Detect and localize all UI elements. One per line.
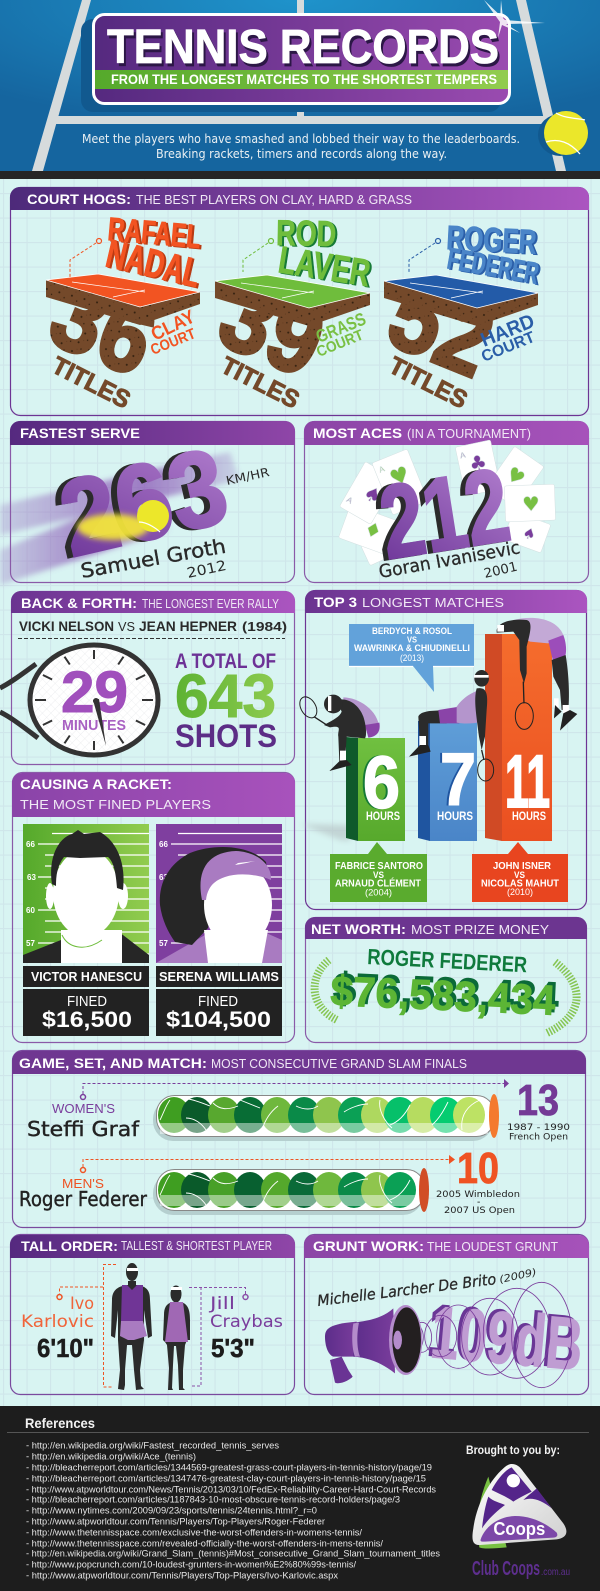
Rod Laver block bbox=[205, 212, 375, 414]
heading bbox=[11, 591, 295, 613]
logo: Club Coops bbox=[472, 1464, 570, 1580]
heading: THE BEST PLAYERS ON CLAY, HARD & GRASS bbox=[136, 192, 412, 207]
intro text: Breaking rackets, timers and records along the way. bbox=[156, 147, 447, 161]
heading: THE MOST FINED PLAYERS bbox=[20, 797, 211, 812]
Roger Federer block: ROGER bbox=[446, 219, 537, 262]
heading bbox=[12, 1051, 586, 1074]
references list: - http://bleacherreport.com/articles/1347476-greatest-clay-court-players-in-tennis-history/page/15 bbox=[26, 1474, 426, 1484]
callout: Santoro vs Clement: (2004) bbox=[365, 888, 392, 898]
heading bbox=[10, 1235, 295, 1258]
Rafael Nadal block: RAFAEL bbox=[106, 210, 202, 255]
number 212: 212 bbox=[367, 448, 512, 583]
mugshot: Victor Hanescu: 57 bbox=[26, 939, 35, 948]
references list: - http://en.wikipedia.org/wiki/Fastest_recorded_tennis_serves bbox=[26, 1440, 279, 1452]
heading: COURT HOGS: bbox=[27, 191, 131, 207]
heading: TALL ORDER: bbox=[21, 1238, 118, 1254]
height brackets bbox=[57, 1264, 248, 1387]
number 263: 263 bbox=[49, 424, 238, 579]
panel: most aces bbox=[304, 421, 589, 583]
icon: megaphone bbox=[325, 1305, 422, 1383]
references list: - http://www.atpworldtour.com/Tennis/Players/Top-Players/Ivo-Karlovic.aspx bbox=[26, 1570, 338, 1582]
year: (2009) bbox=[498, 1267, 538, 1286]
mugshot: Serena Williams: 66 bbox=[159, 840, 168, 849]
bar: 6 hours: 6 bbox=[361, 741, 398, 824]
men's label: Roger Federer bbox=[19, 1187, 148, 1211]
Rod Laver block: LAVER bbox=[278, 240, 375, 296]
playing cards: ♥ bbox=[501, 461, 530, 491]
icon: racket clock bbox=[0, 645, 158, 755]
callout: Isner vs Mahut: VS bbox=[514, 870, 525, 880]
label: Ivo Karlovic bbox=[21, 1294, 94, 1363]
panel: net worth bbox=[305, 917, 587, 1042]
references list: - http://en.wikipedia.org/wiki/Grand_Slam_(tennis)#Most_consecutive_Grand_Slam_tournament_titles bbox=[26, 1548, 440, 1560]
bar: 7 hours: HOURS bbox=[437, 809, 473, 823]
references list: - http://www.nytimes.com/2009/09/23/sports/tennis/24tennis.html?_r=0 bbox=[26, 1506, 317, 1516]
icon: racket clock: MINUTES bbox=[62, 717, 126, 734]
references list: - http://www.thetennisspace.com/revealed-officially-the-worst-offenders-in-mens-tennis/ bbox=[26, 1538, 383, 1550]
label: Jill Craybas: 5'3" bbox=[211, 1333, 255, 1363]
figure: 10 finals: - bbox=[477, 1197, 480, 1208]
sparkle bbox=[484, 0, 545, 38]
Rod Laver block: LAVER bbox=[276, 239, 373, 295]
Rafael Nadal block: CLAY bbox=[148, 306, 199, 345]
women's label: Steffi Graf bbox=[27, 1117, 140, 1141]
Rafael Nadal block: NADAL bbox=[104, 233, 206, 297]
shots total: A TOTAL OF bbox=[175, 650, 276, 673]
mugshot: Serena Williams: 63 bbox=[159, 873, 168, 882]
bar: 7 hours: 7 bbox=[440, 738, 476, 821]
panel: court hogs bbox=[10, 187, 589, 416]
icon: tennis ball bbox=[538, 111, 588, 156]
logo: Club Coops: Coops bbox=[493, 1518, 545, 1539]
bar: 7 hours bbox=[418, 721, 477, 841]
heading: (IN A TOURNAMENT) bbox=[407, 426, 531, 441]
icon: racket clock: 29 bbox=[61, 660, 128, 725]
Rod Laver block: ROD bbox=[278, 213, 339, 255]
heading: GAME, SET, AND MATCH: bbox=[19, 1055, 207, 1071]
playing cards: ♦ bbox=[361, 516, 386, 544]
fine: Victor Hanescu: $16,500 bbox=[42, 1007, 132, 1032]
heading: GRUNT WORK: bbox=[313, 1238, 424, 1254]
mugshot: Serena Williams bbox=[156, 824, 282, 963]
heading bbox=[304, 421, 589, 445]
playing cards: ♠ bbox=[359, 480, 387, 509]
panel: tall order bbox=[10, 1234, 295, 1394]
match up line: JEAN HEPNER bbox=[139, 618, 237, 634]
fine: Victor Hanescu bbox=[23, 989, 149, 1036]
player name: Goran Ivanisevic bbox=[377, 537, 522, 583]
references list: - http://bleacherreport.com/articles/1344569-greatest-grass-court-players-in-tennis-history/page/19 bbox=[26, 1462, 432, 1474]
callout: Isner vs Mahut bbox=[472, 842, 568, 902]
Rod Laver block: COURT bbox=[314, 327, 366, 361]
exhausted players bbox=[296, 618, 577, 781]
references list: - http://en.wikipedia.org/wiki/Ace_(tennis) bbox=[26, 1452, 196, 1462]
heading: MOST CONSECUTIVE GRAND SLAM FINALS bbox=[211, 1056, 467, 1071]
callout: Berdych and Rosol match bbox=[349, 624, 474, 692]
heading: LONGEST MATCHES bbox=[362, 595, 504, 610]
Roger Federer block: 52 bbox=[374, 258, 508, 399]
mugshot: Victor Hanescu: 66 bbox=[26, 840, 35, 849]
figure: 13 finals bbox=[507, 1076, 570, 1142]
heading: THE LONGEST EVER RALLY bbox=[142, 596, 279, 611]
bar: 11 hours bbox=[485, 634, 552, 841]
callout: Isner vs Mahut: (2010) bbox=[507, 887, 533, 897]
Roger Federer block: HARD bbox=[478, 310, 538, 352]
Rafael Nadal block: COURT bbox=[148, 325, 198, 359]
men's label: MEN'S bbox=[62, 1176, 104, 1191]
Roger Federer block: COURT bbox=[479, 329, 538, 366]
heading bbox=[12, 773, 295, 817]
prize figure: $76,583,434 bbox=[333, 964, 560, 1021]
figure: 13 finals: 13 bbox=[517, 1076, 559, 1125]
tube: 13 tennis balls bbox=[153, 1094, 499, 1141]
figure: 10 finals: 10 bbox=[457, 1144, 499, 1193]
callout: Berdych and Rosol match: (2013) bbox=[400, 653, 424, 663]
bar: 6 hours bbox=[346, 737, 405, 841]
shots total bbox=[175, 650, 277, 754]
name plate: Serena Williams bbox=[156, 966, 282, 987]
playing cards bbox=[338, 440, 556, 566]
panel: causing a racket bbox=[12, 772, 295, 1042]
icon: tennis ball with trail bbox=[77, 500, 169, 540]
panel: top 3 longest matches bbox=[296, 590, 587, 910]
playing cards: A bbox=[459, 450, 467, 460]
footer panel bbox=[0, 1406, 600, 1591]
mugshot: Victor Hanescu bbox=[23, 824, 149, 963]
heading: NET WORTH: bbox=[311, 921, 406, 937]
heading bbox=[304, 1235, 589, 1258]
speed unit: KM/HR bbox=[225, 465, 271, 488]
Rafael Nadal block: 36 bbox=[36, 257, 170, 398]
heading: THE LOUDEST GRUNT bbox=[427, 1239, 558, 1254]
playing cards: ♥ bbox=[522, 492, 540, 516]
figure: tall man bbox=[111, 1263, 152, 1390]
year: 2001 bbox=[483, 560, 519, 582]
number 212: 212 bbox=[372, 447, 517, 582]
callout: Berdych and Rosol match: BERDYCH & ROSOL bbox=[372, 626, 452, 636]
bar: 11 hours: HOURS bbox=[512, 809, 546, 823]
playing cards: ♠ bbox=[384, 545, 392, 556]
callout: Santoro vs Clement: FABRICE SANTORO bbox=[335, 861, 423, 872]
header: tennis court banner bbox=[0, 0, 600, 179]
heading: CAUSING A RACKET: bbox=[20, 776, 172, 792]
figure: 13 finals: 1987 - 1990 bbox=[507, 1123, 570, 1133]
number 263: 263 bbox=[43, 425, 232, 580]
player name: Samuel Groth bbox=[79, 534, 228, 583]
tube: 10 tennis balls bbox=[153, 1168, 429, 1215]
panel: grunt work bbox=[304, 1234, 589, 1394]
fine: Victor Hanescu: FINED bbox=[67, 993, 107, 1010]
year: 2012 bbox=[186, 558, 228, 582]
floor shadow bbox=[300, 824, 350, 841]
Roger Federer block: TITLES bbox=[384, 351, 472, 414]
label: Ivo Karlovic: Ivo bbox=[70, 1294, 94, 1314]
references list: - http://www.atpworldtour.com/News/Tennis/2013/03/10/FedEx-Reliability-Career-Hard-Court-Records bbox=[26, 1484, 436, 1496]
heading: MOST PRIZE MONEY bbox=[411, 922, 549, 937]
match up line: VICKI NELSON bbox=[19, 618, 114, 634]
callout: Santoro vs Clement bbox=[330, 842, 427, 902]
title text: TENNIS RECORDS bbox=[109, 24, 501, 77]
heading: MOST ACES bbox=[313, 425, 402, 441]
references list: - http://bleacherreport.com/articles/1187843-10-most-obscure-tennis-record-holders/page/3 bbox=[26, 1494, 400, 1506]
title box bbox=[94, 14, 510, 104]
laurels bbox=[315, 960, 577, 1033]
panel: back and forth bbox=[0, 591, 295, 764]
heading bbox=[305, 590, 587, 613]
fine: Serena Williams: $104,500 bbox=[166, 1007, 271, 1032]
subtitle: FROM THE LONGEST MATCHES TO THE SHORTEST TEMPERS bbox=[111, 71, 497, 87]
mugshot: Victor Hanescu: 63 bbox=[27, 873, 36, 882]
heading bbox=[10, 187, 589, 210]
fine: Serena Williams: FINED bbox=[198, 993, 238, 1010]
figure: short woman bbox=[163, 1286, 190, 1390]
label: Ivo Karlovic: Karlovic bbox=[21, 1312, 94, 1332]
references heading: References bbox=[25, 1415, 95, 1431]
playing cards: A bbox=[377, 464, 386, 475]
Rafael Nadal block: TITLES bbox=[47, 351, 135, 414]
playing cards: ♥ bbox=[386, 462, 414, 492]
Roger Federer block: FEDERER bbox=[445, 242, 541, 291]
Roger Federer block: ROGER bbox=[448, 220, 539, 263]
Roger Federer block bbox=[374, 219, 543, 414]
Rod Laver block: 39 bbox=[205, 258, 339, 399]
callout: Berdych and Rosol match: WAWRINKA & CHIUDINELLI bbox=[354, 643, 470, 653]
sponsor line: Brought to you by: bbox=[466, 1445, 560, 1457]
women's label bbox=[27, 1079, 509, 1141]
Rod Laver block: GRASS bbox=[313, 309, 369, 347]
speed blur bbox=[0, 452, 240, 585]
figure: 10 finals: 2007 US Open bbox=[444, 1206, 515, 1216]
player name: Michelle Larcher De Brito bbox=[316, 1270, 497, 1310]
match up line bbox=[19, 618, 287, 634]
sound rings bbox=[407, 1282, 572, 1388]
match up line: VS bbox=[118, 619, 135, 634]
label: Ivo Karlovic: 6'10" bbox=[37, 1333, 94, 1363]
Rod Laver block: ROD bbox=[276, 212, 337, 254]
bar: 6 hours: 6 bbox=[363, 741, 400, 824]
match up line: (1984) bbox=[242, 619, 287, 634]
bar: 6 hours: HOURS bbox=[366, 809, 400, 823]
references list: - http://www.thetennisspace.com/exclusive-the-worst-offenders-in-womens-tennis/ bbox=[26, 1528, 362, 1538]
intro text: Meet the players who have smashed and lobbed their way to the leaderboards. bbox=[82, 132, 520, 146]
women's label: WOMEN'S bbox=[52, 1101, 115, 1116]
intro text bbox=[82, 132, 520, 161]
shots total: SHOTS bbox=[175, 718, 277, 754]
Rod Laver block: TITLES bbox=[216, 351, 304, 414]
Rafael Nadal block: RAFAEL bbox=[108, 211, 204, 256]
mugshot: Victor Hanescu: 60 bbox=[26, 906, 35, 915]
heading: TALLEST & SHORTEST PLAYER bbox=[121, 1238, 272, 1253]
figure: 13 finals: French Open bbox=[509, 1132, 568, 1142]
prize figure: $76,583,434 bbox=[330, 967, 557, 1024]
playing cards: ♣ bbox=[467, 449, 489, 477]
name plate: Victor Hanescu: VICTOR HANESCU bbox=[31, 969, 142, 984]
bar: 11 hours: 11 bbox=[505, 740, 550, 823]
callout: Santoro vs Clement: ARNAUD CLÉMENT bbox=[335, 876, 421, 890]
shots total: 643 bbox=[175, 662, 276, 730]
Roger Federer block: FEDERER bbox=[447, 243, 543, 292]
panel: fastest serve bbox=[0, 421, 295, 585]
fine: Serena Williams bbox=[156, 989, 282, 1036]
panel: game set and match bbox=[12, 1050, 586, 1228]
title text: TENNIS RECORDS bbox=[107, 21, 499, 74]
references list: - http://www.popcrunch.com/10-loudest-grunters-in-women%E2%80%99s-tennis/ bbox=[26, 1560, 356, 1570]
heading bbox=[305, 917, 587, 939]
callout: Santoro vs Clement: VS bbox=[373, 870, 384, 880]
name plate: Victor Hanescu bbox=[23, 966, 149, 987]
callout: Isner vs Mahut: JOHN ISNER bbox=[493, 861, 552, 872]
heading: FASTEST SERVE bbox=[20, 425, 140, 441]
references list: - http://www.atpworldtour.com/Tennis/Players/Top-Players/Roger-Federer bbox=[26, 1516, 325, 1528]
callout: Isner vs Mahut: NICOLAS MAHUT bbox=[481, 878, 559, 890]
bar: 7 hours: 7 bbox=[438, 738, 474, 821]
Rafael Nadal block: NADAL bbox=[102, 232, 204, 296]
name plate: Serena Williams: SERENA WILLIAMS bbox=[159, 969, 279, 984]
heading: BACK & FORTH: bbox=[21, 595, 137, 611]
heading bbox=[10, 421, 295, 445]
label: Jill Craybas: Jill bbox=[209, 1294, 235, 1314]
label: Jill Craybas bbox=[209, 1294, 283, 1363]
references list bbox=[26, 1440, 440, 1582]
Rafael Nadal block bbox=[36, 210, 206, 414]
label: Jill Craybas: Craybas bbox=[210, 1312, 283, 1332]
men's label bbox=[19, 1155, 455, 1211]
playing cards: A bbox=[345, 495, 355, 506]
player name: ROGER FEDERER bbox=[367, 944, 528, 977]
mugshot: Serena Williams: 57 bbox=[159, 939, 168, 948]
playing cards: ♠ bbox=[520, 523, 539, 545]
figure: 10 finals bbox=[436, 1144, 520, 1216]
heading: TOP 3 bbox=[314, 594, 357, 610]
figure: 10 finals: 2005 Wimbledon bbox=[436, 1190, 520, 1200]
callout: Berdych and Rosol match: VS bbox=[407, 636, 418, 644]
logo: Club Coops: .com.au bbox=[541, 1567, 570, 1578]
logo: Club Coops: Club Coops bbox=[472, 1558, 540, 1580]
